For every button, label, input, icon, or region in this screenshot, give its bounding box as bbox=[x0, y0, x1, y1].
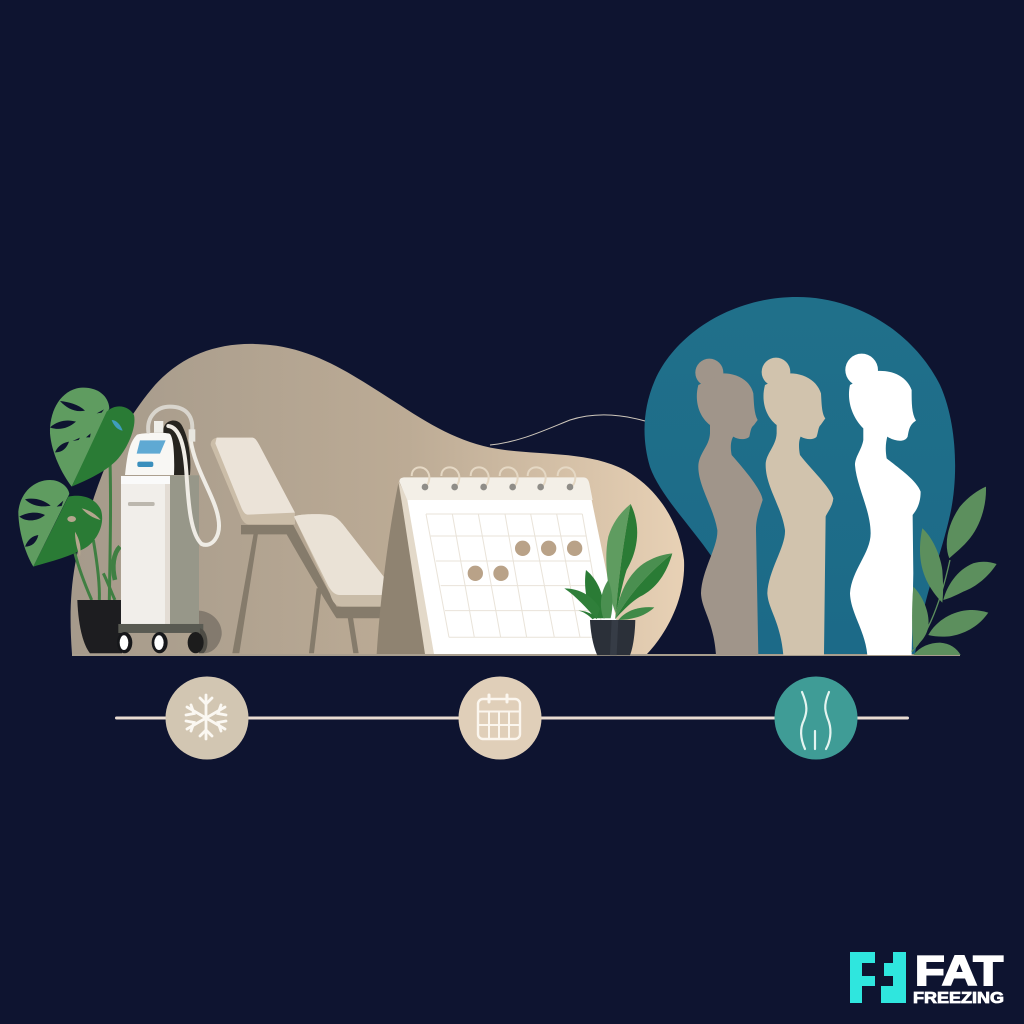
upper leaf bbox=[50, 388, 134, 487]
brand logo bbox=[850, 947, 1004, 1007]
beige blob bbox=[71, 344, 684, 654]
calendar icon bbox=[478, 695, 520, 739]
teal blob bbox=[645, 297, 955, 654]
potted plant bbox=[564, 504, 672, 655]
wheels bbox=[117, 632, 204, 653]
connecting wire bbox=[490, 415, 645, 445]
calendar header bbox=[399, 477, 593, 500]
silhouette during bbox=[762, 358, 833, 655]
logo wordmark FAT: FAT bbox=[915, 947, 1003, 994]
dark hose housing bbox=[163, 420, 190, 475]
logo wordmark FREEZING: FREEZING bbox=[913, 990, 1004, 1007]
machine shadow bbox=[199, 611, 222, 653]
seat bbox=[294, 514, 385, 607]
machine side panel bbox=[170, 475, 199, 625]
plant stems bbox=[75, 443, 120, 600]
plant leaves bbox=[606, 504, 631, 613]
chair legs bbox=[232, 532, 359, 653]
spiral rings bbox=[412, 467, 575, 487]
floor line bbox=[72, 654, 960, 656]
lower leaf bbox=[18, 480, 102, 567]
silhouette after bbox=[845, 354, 921, 655]
machine front panel bbox=[121, 477, 170, 625]
calendar back stand bbox=[377, 483, 428, 654]
calendar page bbox=[407, 500, 623, 654]
plant pot bbox=[77, 600, 122, 653]
wall calendar bbox=[377, 467, 672, 655]
body contour icon bbox=[801, 692, 830, 749]
step 1: freeze icon bbox=[166, 676, 248, 760]
step 2: calendar icon bbox=[458, 676, 542, 760]
monstera plant bbox=[18, 388, 134, 653]
machine head bbox=[125, 433, 174, 475]
chair frame bbox=[241, 525, 382, 618]
marked days bbox=[468, 541, 582, 581]
step 3: body contour icon bbox=[774, 676, 858, 760]
silhouette before bbox=[695, 359, 763, 655]
timeline line bbox=[115, 716, 909, 720]
backrest bbox=[211, 438, 295, 524]
calendar grid bbox=[426, 514, 604, 637]
right side leaf sprig bbox=[912, 487, 997, 655]
treatment chair bbox=[211, 438, 385, 653]
three body silhouettes bbox=[695, 354, 921, 655]
calendar side edge bbox=[399, 482, 435, 654]
handpiece cable bbox=[148, 407, 219, 545]
plant pot bbox=[590, 620, 635, 655]
snowflake icon bbox=[186, 695, 226, 739]
screen bbox=[137, 440, 166, 454]
logo mark bbox=[850, 952, 906, 1003]
vent slot bbox=[128, 502, 155, 506]
cryolipolysis machine bbox=[117, 407, 222, 653]
machine base bbox=[118, 624, 203, 633]
ring holes bbox=[422, 484, 573, 490]
button bbox=[137, 462, 153, 467]
